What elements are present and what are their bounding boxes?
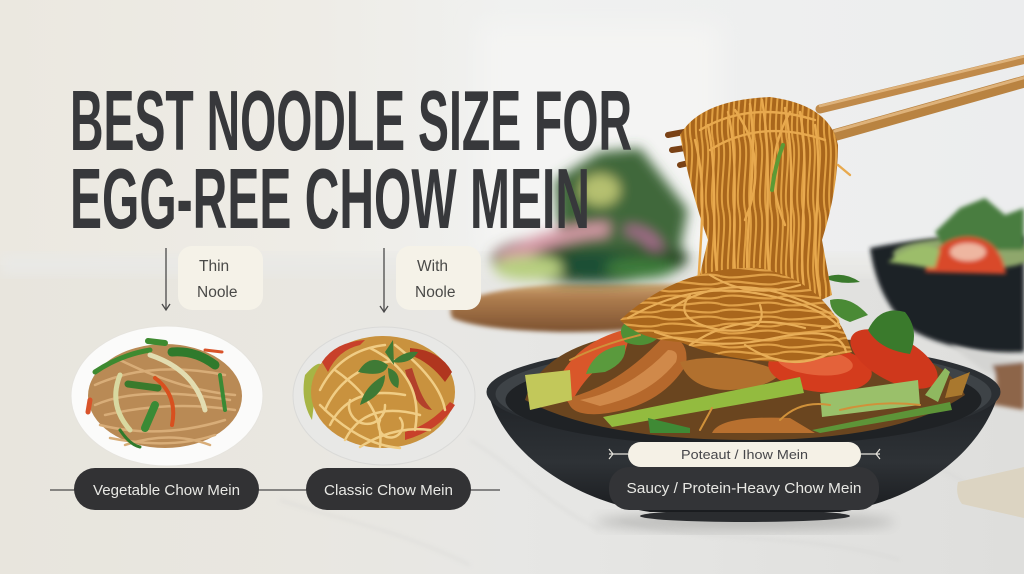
napkin [957,467,1024,518]
cloth and utensil behind main bowl [950,345,1024,410]
callout: thin noodle: Noole [197,284,238,301]
plate: vegetable chow mein [71,326,263,466]
tomato slices [766,341,874,397]
bracket decoration beside light pill [609,449,880,459]
background salad on wooden board [450,148,690,332]
arrow: thin noodle [162,248,170,310]
noodle tower lifted by chopsticks [668,97,850,312]
title [70,74,632,247]
callout: thin noodle [178,246,263,310]
pill: classic chow mein [306,468,471,510]
pill: classic chow mein: Classic Chow Mein [324,483,453,499]
title: EGG-REE CHOW MEIN [70,152,590,247]
pill: vegetable chow mein: Vegetable Chow Mein [93,483,240,499]
pill: saucy / protein-heavy chow mein: Saucy / Protein-Heavy Chow Mein [626,481,862,497]
plate: classic chow mein [293,327,475,465]
arrow: with noodle [380,248,388,312]
mushroom slices [568,335,687,414]
pill: vegetable chow mein [74,468,259,510]
food in bowl [525,275,970,440]
callout: with noodle: With [417,258,448,275]
chopsticks [820,55,1024,135]
pill: poteaut / ihow mein [628,442,861,467]
base vegetables mass [525,335,965,440]
basil leaves [621,316,665,345]
callout: with noodle [396,246,481,310]
connector line [50,489,500,491]
callout: thin noodle: Thin [199,258,229,275]
background black bowl with salad [870,198,1024,352]
green bean and celery [603,377,804,427]
callout: with noodle: Noole [415,284,456,301]
pill: poteaut / ihow mein: Poteaut / Ihow Mein [681,447,808,462]
main bowl [486,342,1000,531]
orange garnish [556,328,632,405]
pill: saucy / protein-heavy chow mein [609,467,879,510]
noodle pile [570,268,920,430]
